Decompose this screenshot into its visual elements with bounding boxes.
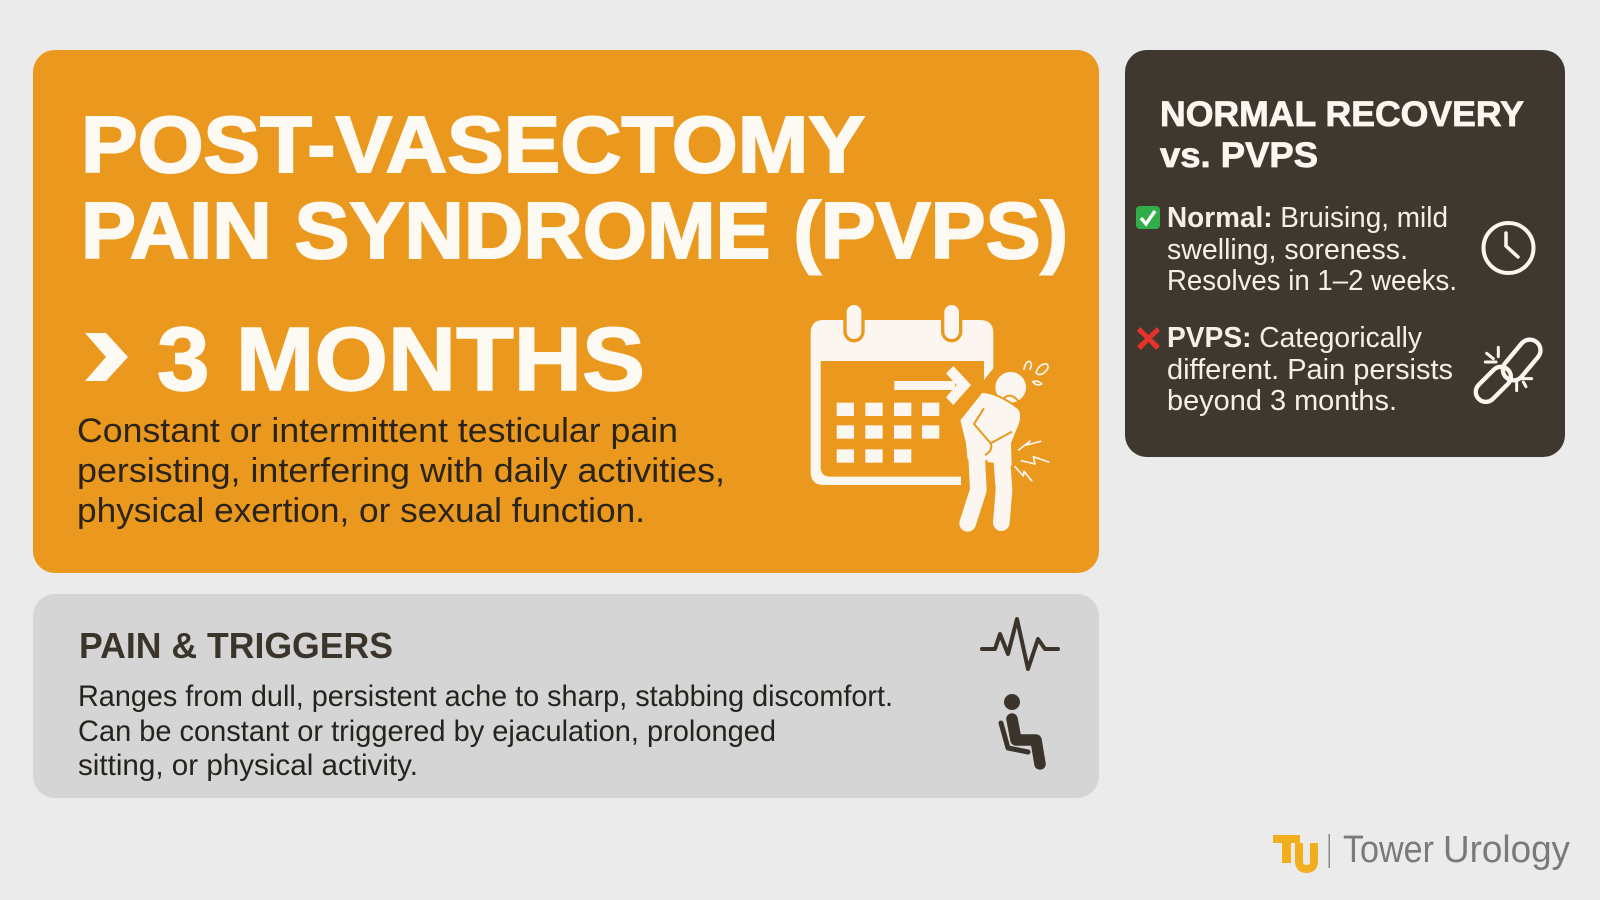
- text: PVPS: PVPS: Categorically: [1167, 322, 1422, 354]
- icon: green check: [1136, 206, 1160, 229]
- logo: Tower Urology: Tower: [1343, 829, 1434, 871]
- panel: normal recovery vs PVPS: [1125, 50, 1565, 457]
- text: definition: Constant or intermittent testicular pain: [77, 412, 678, 450]
- text: normal recovery: swelling, soreness.: [1167, 234, 1408, 266]
- text: PVPS: [1167, 322, 1453, 417]
- title: [81, 100, 1068, 275]
- text: definition: physical exertion, or sexual function.: [77, 492, 645, 530]
- text: pain description: [78, 680, 893, 782]
- panel: PVPS definition: [33, 50, 1099, 573]
- heading: pain and triggers: PAIN & TRIGGERS: [79, 625, 393, 666]
- heading: normal recovery vs PVPS: vs. PVPS: [1160, 136, 1318, 175]
- text: PVPS: beyond 3 months.: [1167, 385, 1397, 417]
- text: PVPS: different. Pain persists: [1167, 354, 1453, 386]
- icon: red cross: [1137, 327, 1160, 350]
- text: pain description: Can be constant or triggered by ejaculation, prolonged: [78, 715, 776, 748]
- icon: chevron greater-than: [85, 333, 128, 381]
- panel: pain and triggers: [33, 594, 1099, 798]
- heading: 3 months: 3 MONTHS: [157, 310, 645, 410]
- text: definition: persisting, interfering with daily activities,: [77, 452, 725, 490]
- text: pain description: Ranges from dull, persistent ache to sharp, stabbing discomfort.: [78, 680, 893, 713]
- logo: Tower Urology: [1273, 829, 1570, 871]
- text: normal recovery: [1167, 202, 1457, 297]
- heading: normal recovery vs PVPS: NORMAL RECOVERY: [1160, 95, 1524, 134]
- title: PAIN SYNDROME (PVPS): [81, 186, 1068, 275]
- text: definition: [77, 412, 725, 530]
- heading: normal recovery vs PVPS: [1160, 95, 1524, 175]
- icon: seated person: [1001, 694, 1040, 764]
- text: normal recovery: Normal: Bruising, mild: [1167, 202, 1448, 234]
- logo: Tower Urology: Urology: [1443, 829, 1570, 871]
- text: normal recovery: Resolves in 1–2 weeks.: [1167, 265, 1457, 297]
- text: pain description: sitting, or physical activity.: [78, 749, 418, 782]
- title: POST-VASECTOMY: [81, 100, 865, 189]
- icon: clock: [1484, 223, 1534, 273]
- icon: broken chain link: [1472, 335, 1545, 406]
- icon: pulse: [982, 619, 1058, 669]
- icon: calendar with person in pain: [811, 303, 1049, 523]
